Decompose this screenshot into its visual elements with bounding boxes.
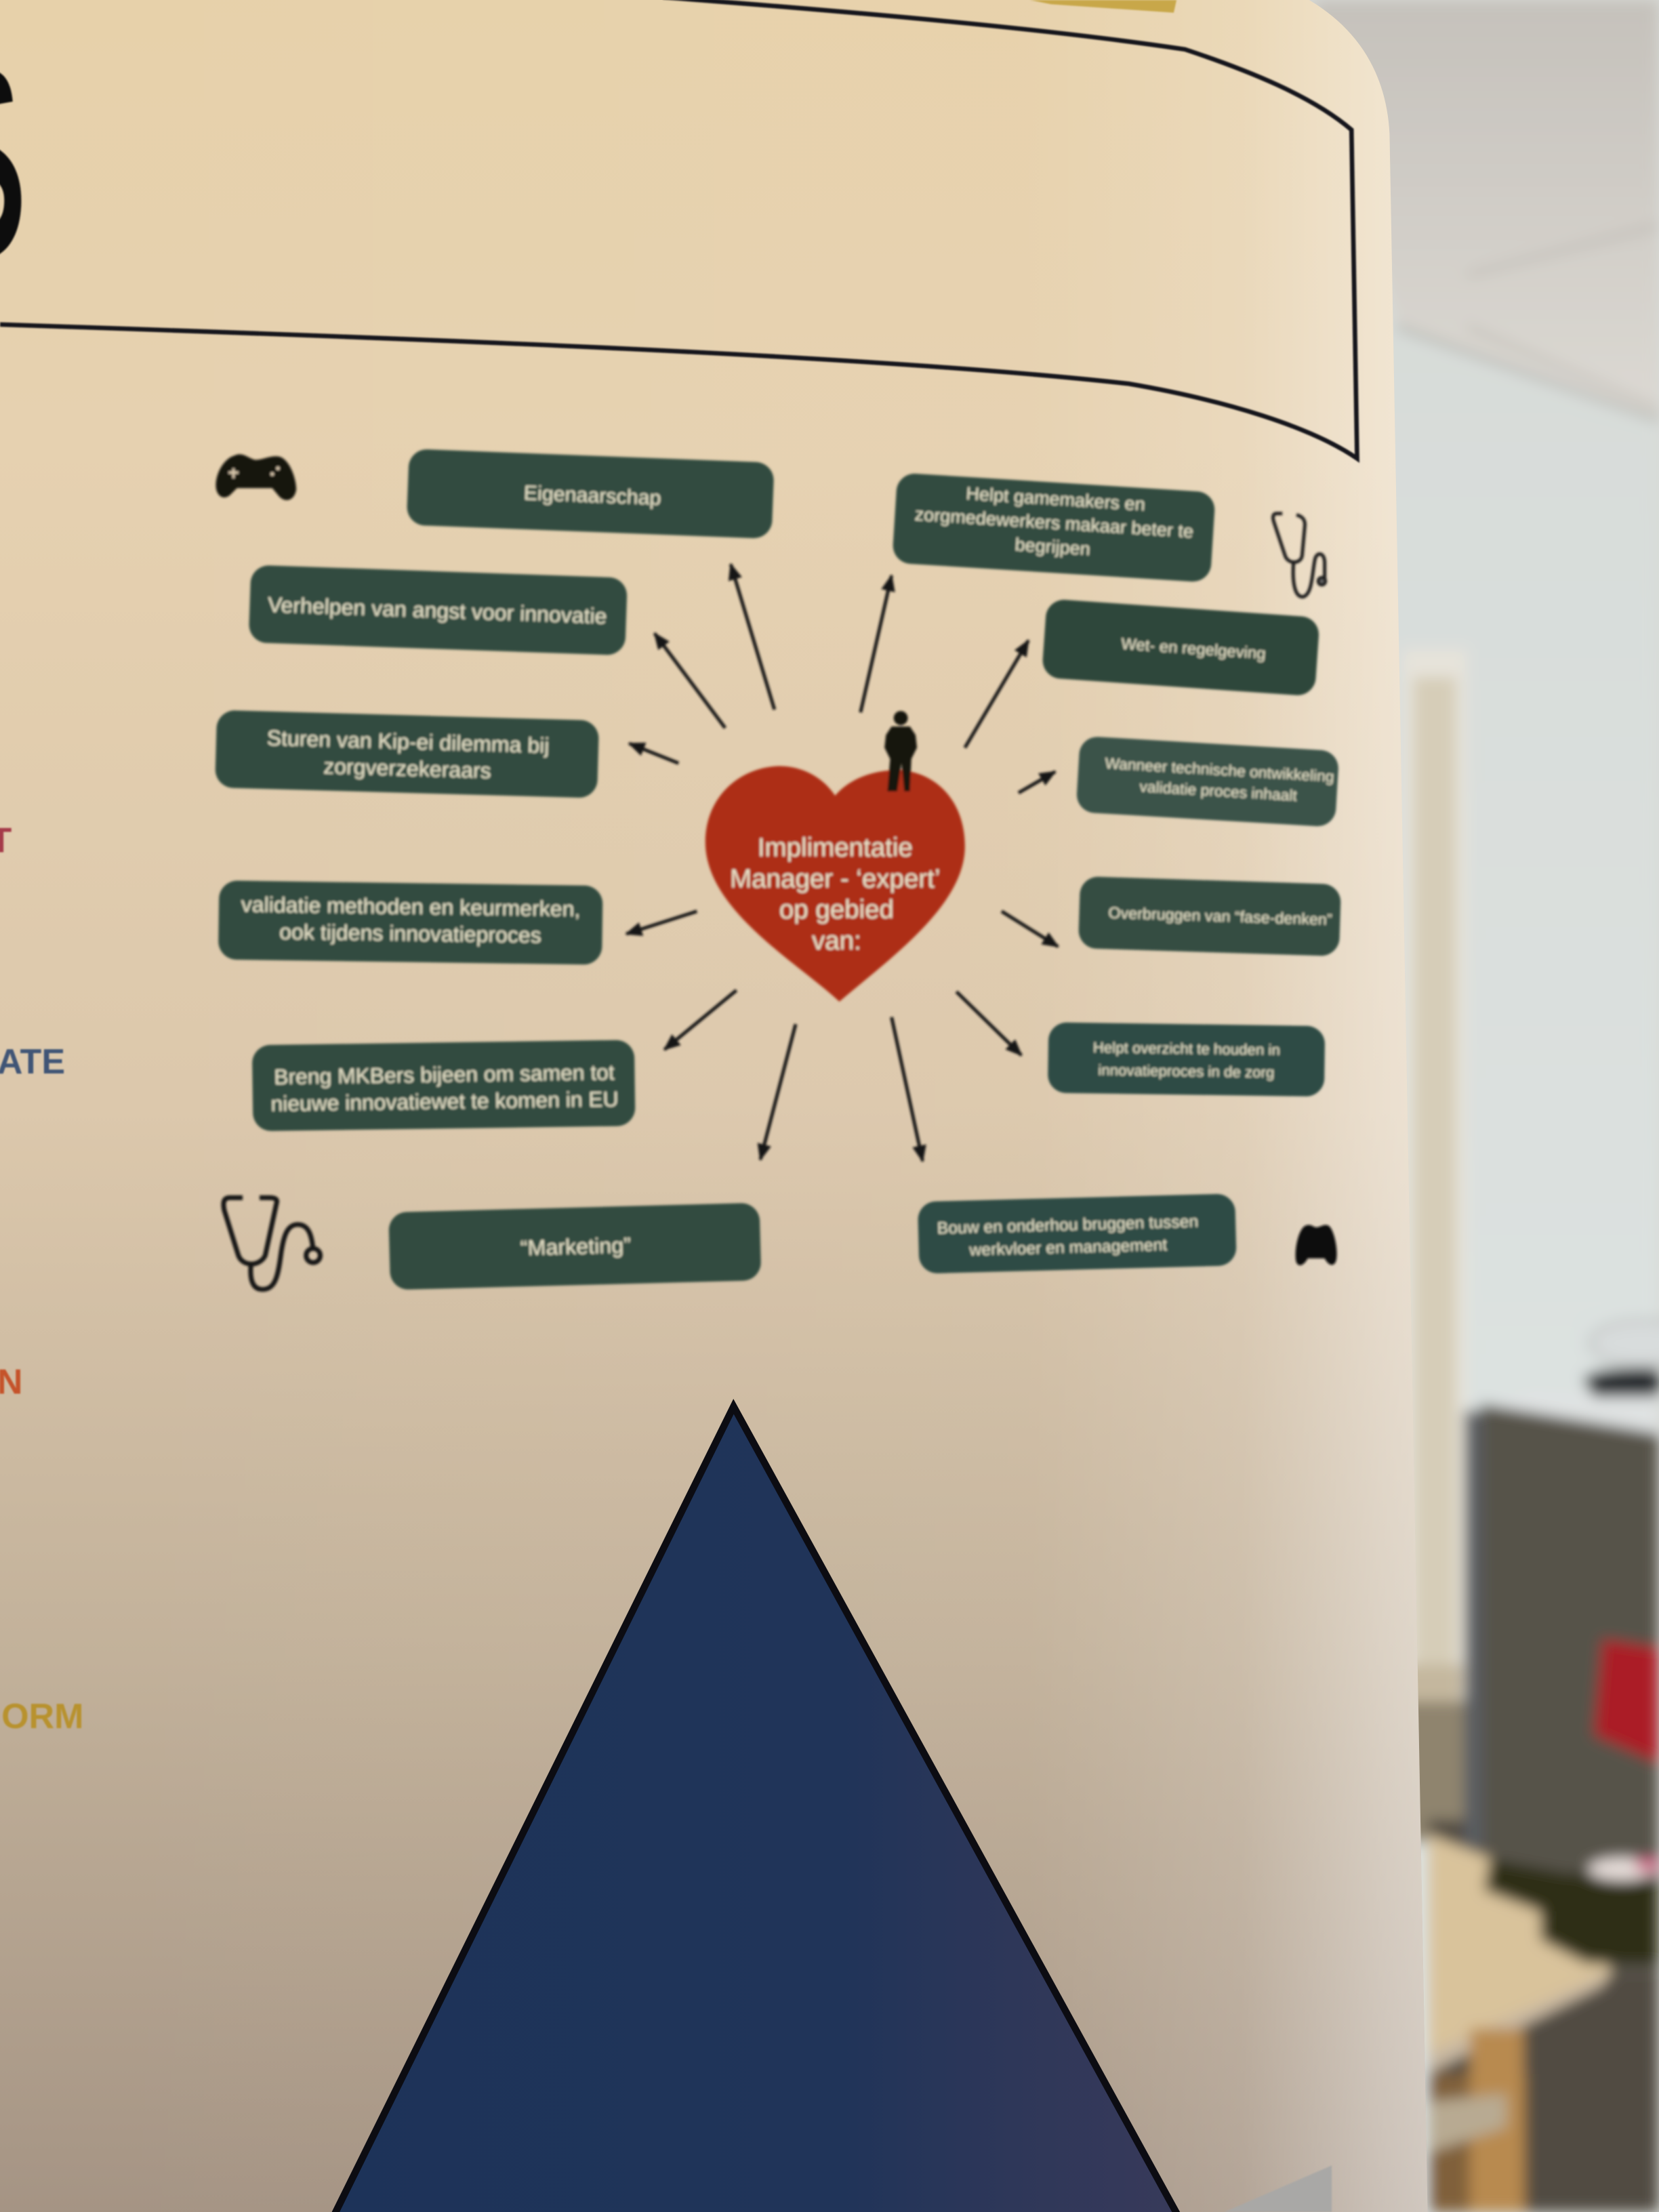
pill: Bouw en onderhou bruggen: werkvloer en management (968, 1236, 1168, 1260)
green object on table (1484, 1858, 1659, 1964)
pill: Verhelpen van angst: Verhelpen van angst voor innovatie (267, 592, 607, 628)
pill: Bouw en onderhou bruggen: Bouw en onderhou bruggen tussen (937, 1212, 1199, 1238)
diagram: implementation manager (215, 449, 1341, 1290)
pill: Overbruggen (1078, 876, 1341, 956)
left edge labels (0, 821, 83, 1736)
pill: Wet- en regelgeving: Wet- en regelgeving (1120, 635, 1266, 663)
heart: Manager - ‘expert’ (730, 864, 940, 893)
pill: Helpt overzicht (1048, 1022, 1325, 1097)
pill: validatie methoden (218, 880, 603, 965)
icon: stethoscope top right (1273, 514, 1326, 597)
icon: stethoscope bottom left (224, 1197, 321, 1290)
pill: Verhelpen van angst (249, 565, 628, 655)
pill: Sturen van Kip-ei dilemma: zorgverzekeraars (323, 754, 491, 783)
blue triangle (330, 1406, 1182, 2212)
pill: Helpt overzicht: Helpt overzicht te houden in (1093, 1039, 1280, 1059)
pill: Helpt gamemakers: zorgmedewerkers makaar beter te (914, 504, 1194, 542)
arrows (626, 565, 1058, 1161)
pill: Sturen van Kip-ei dilemma (215, 710, 599, 798)
pill: Helpt gamemakers (892, 472, 1216, 583)
icon: game controller bottom right (1296, 1225, 1337, 1265)
pill: Bouw en onderhou bruggen (918, 1193, 1237, 1274)
red object (1594, 1639, 1659, 1763)
door frame (1402, 649, 1467, 1843)
gold strip at top (1030, 0, 1176, 13)
pill: validatie methoden: validatie methoden en keurmerken, (241, 892, 581, 921)
pill: Eigenaarschap: Eigenaarschap (523, 481, 661, 510)
pill: Wanneer technische ontwikkeling: Wanneer technische ontwikkeling (1105, 754, 1334, 785)
heart (705, 766, 965, 1002)
pill: Wanneer technische ontwikkeling (1076, 736, 1339, 827)
pill: Breng MKBers bijeen (252, 1040, 636, 1131)
ceiling (1312, 0, 1659, 420)
pill: Overbruggen: Overbruggen van “fase-denken” (1108, 904, 1332, 928)
heart: van: (812, 926, 861, 956)
pill: validatie methoden: ook tijdens innovatieproces (279, 920, 541, 947)
grey corner panel (1225, 2165, 1332, 2212)
left edge labels: ORM (1, 1697, 83, 1736)
icon: person standing on heart (884, 711, 917, 792)
heart: op gebied (779, 895, 894, 924)
pill: Breng MKBers bijeen: nieuwe innovatiewet te komen in EU (270, 1087, 619, 1116)
cabinet (1428, 1389, 1659, 2212)
title box outline (0, 0, 1357, 459)
pill: Wet- en regelgeving (1042, 598, 1320, 697)
pill: Breng MKBers bijeen: Breng MKBers bijeen om samen tot (274, 1060, 615, 1089)
pill: Helpt overzicht: innovatieproces in de zorg (1098, 1061, 1275, 1081)
icon: game controller top left (216, 454, 296, 500)
pill: Marketing: “Marketing” (520, 1233, 631, 1261)
plate on cabinet (1583, 1320, 1659, 1397)
pill: Helpt gamemakers: Helpt gamemakers en (966, 483, 1146, 515)
pill: Helpt gamemakers: begrijpen (1015, 534, 1091, 559)
pill: Sturen van Kip-ei dilemma: Sturen van Kip-ei dilemma bij (266, 726, 550, 758)
background: office room (1269, 0, 1659, 2212)
pill: Eigenaarschap (407, 449, 775, 539)
heart: Implimentatie (758, 834, 913, 863)
pill: Marketing (388, 1203, 761, 1290)
pill: Wanneer technische ontwikkeling: validatie proces inhaalt (1139, 777, 1298, 804)
title fragment: letter S (0, 70, 21, 257)
table (1428, 1834, 1612, 2212)
